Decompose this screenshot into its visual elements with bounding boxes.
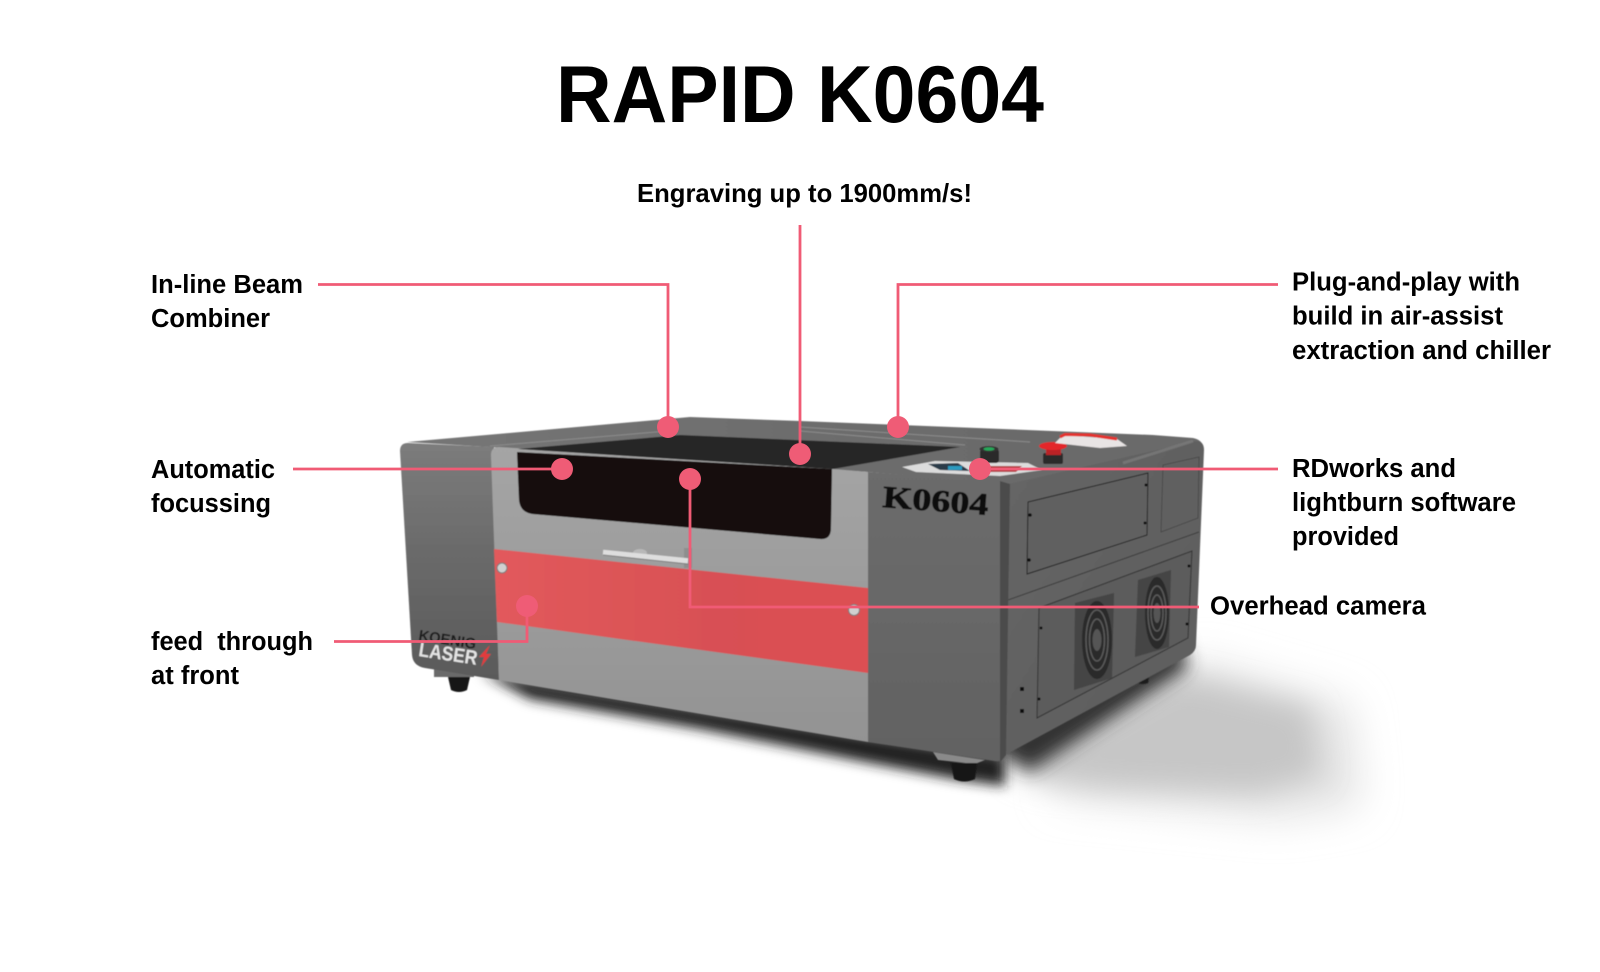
- control panel: [902, 461, 1042, 476]
- foot bracket: front left: [434, 668, 474, 677]
- callout line: in-line beam combiner: [318, 284, 668, 427]
- dark viewing window: [517, 452, 832, 539]
- model badge: K0604: [881, 479, 990, 522]
- callout line: feed through: [334, 606, 527, 642]
- label: plug and play: Plug-and-play with: [1292, 268, 1520, 296]
- small rear plate: [1161, 457, 1199, 532]
- label: automatic focussing: [151, 456, 275, 518]
- floor shadow: [480, 640, 1360, 818]
- label: in-line beam combiner: Combiner: [151, 305, 270, 333]
- callout line: overhead camera: [690, 479, 1199, 607]
- label: in-line beam combiner: In-line Beam: [151, 271, 303, 299]
- red front panel: [494, 549, 868, 673]
- side panel: [1005, 441, 1204, 755]
- foot: front left: [448, 677, 470, 692]
- brand logo: [417, 627, 491, 670]
- brand logo: KOENIG: [417, 627, 477, 653]
- label: engraving speed: Engraving up to 1900mm/s!: [637, 178, 972, 208]
- label: feed through: [151, 628, 313, 690]
- left column: [400, 443, 499, 680]
- red emergency stop: [1039, 442, 1067, 464]
- label: plug and play: build in air-assist: [1292, 302, 1504, 330]
- label: feed through: at front: [151, 662, 239, 690]
- top surface rails: [490, 427, 1030, 446]
- door handle: [603, 548, 692, 568]
- top surface: [407, 417, 1203, 484]
- brand logo: LASER: [417, 639, 479, 670]
- label: in-line beam combiner: [151, 271, 303, 333]
- callout line: engraving speed: [799, 225, 801, 454]
- label: software: provided: [1292, 523, 1399, 551]
- callout line: software: [980, 468, 1278, 470]
- callout dots: [516, 416, 991, 617]
- label: automatic focussing: Automatic: [151, 456, 275, 484]
- label: automatic focussing: focussing: [151, 490, 271, 518]
- label: software: lightburn software: [1292, 489, 1516, 517]
- white safety handle: [1055, 434, 1127, 448]
- lower access plate: [1037, 551, 1192, 718]
- fan one: [1074, 593, 1114, 690]
- front grey frame: [491, 447, 868, 742]
- lid top glass: [518, 435, 960, 469]
- label: overhead camera: Overhead camera: [1210, 592, 1427, 620]
- screws: [497, 563, 860, 616]
- callout line: automatic focussing: [293, 468, 562, 470]
- callout line: plug and play: [898, 284, 1278, 427]
- green start button: [980, 446, 999, 463]
- foot: back right: [1137, 676, 1149, 684]
- laser cutter machine: [400, 417, 1204, 782]
- label: plug and play: [1292, 268, 1551, 365]
- foot: front right: [951, 763, 977, 782]
- upper access plate: [1027, 473, 1148, 574]
- label: feed through: feed through: [151, 628, 313, 656]
- label: software: [1292, 455, 1516, 551]
- label: plug and play: extraction and chiller: [1292, 337, 1551, 365]
- fan two: [1135, 570, 1171, 657]
- foot bracket: front right: [933, 752, 985, 764]
- label: software: RDworks and: [1292, 455, 1456, 483]
- front right column: [868, 472, 1010, 761]
- title: RAPID K0604: [556, 50, 1044, 140]
- ridge highlight: [1123, 441, 1193, 463]
